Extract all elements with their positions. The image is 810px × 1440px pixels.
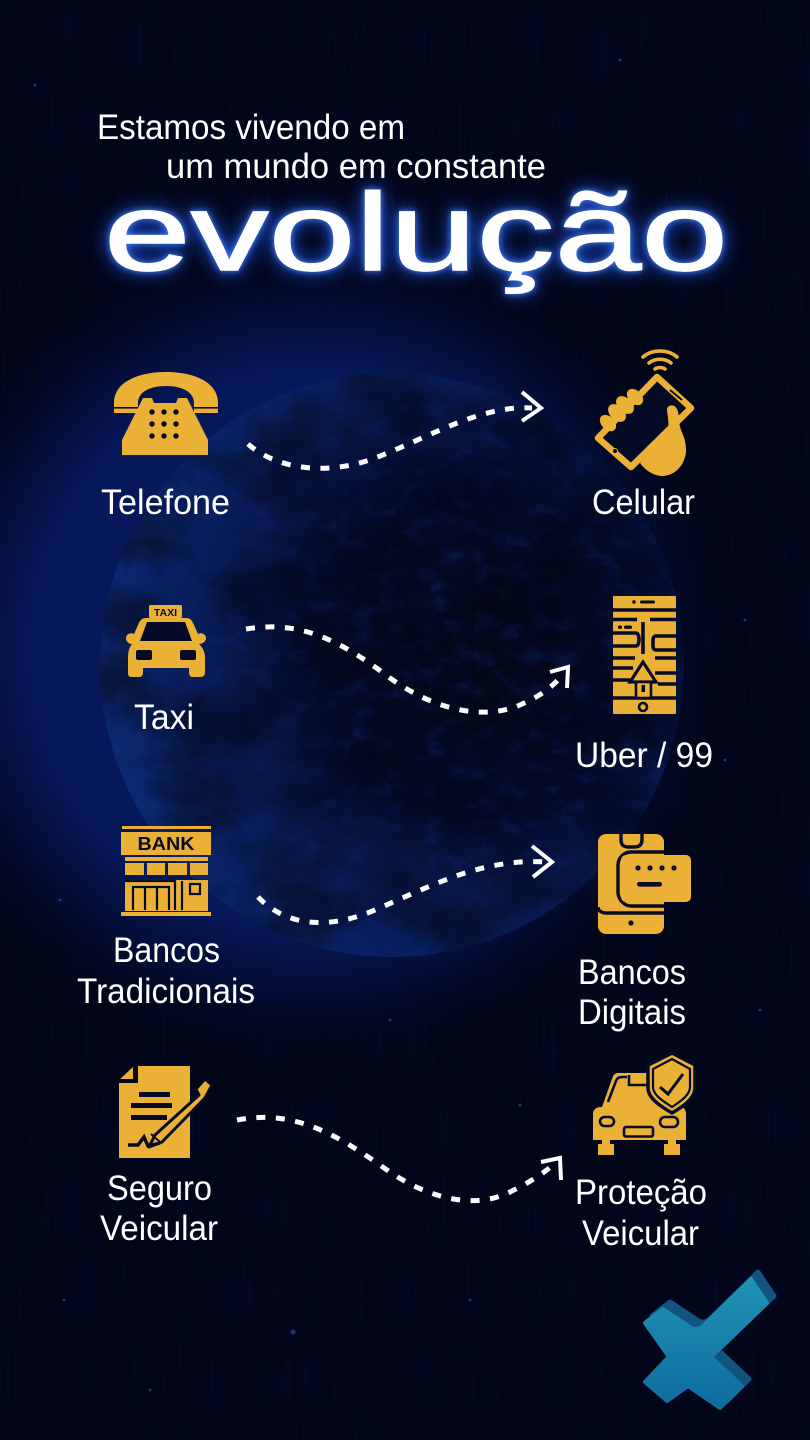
label: Celular: Celular <box>592 483 695 522</box>
title intro text: Estamos vivendo em <box>97 108 405 147</box>
label: Proteção Veicular: Proteção <box>575 1173 707 1212</box>
label: Bancos Tradicionais: Tradicionais <box>77 972 255 1011</box>
label: Proteção Veicular: Veicular <box>582 1214 699 1253</box>
label: Seguro Veicular: Veicular <box>100 1209 218 1248</box>
title intro text <box>97 108 546 186</box>
icon: bank building <box>121 826 211 916</box>
icon: ride app phone map <box>613 596 676 714</box>
label: Bancos Tradicionais <box>77 931 255 1011</box>
label: Seguro Veicular: Seguro <box>107 1169 212 1208</box>
icon: telephone <box>112 372 220 455</box>
label: Bancos Tradicionais: Bancos <box>113 931 220 970</box>
icon: smartphone in hand <box>597 351 691 476</box>
icon: bank building: BANK <box>138 834 194 854</box>
icon: protected car with shield <box>593 1053 695 1155</box>
arrow: taxi to uber <box>246 627 568 712</box>
label: Proteção Veicular <box>575 1173 707 1253</box>
icon: digital bank phone <box>598 832 691 934</box>
arrow: bancos tradicionais to digitais <box>258 846 552 923</box>
icon: signed document <box>119 1066 212 1158</box>
label: Seguro Veicular <box>100 1169 218 1248</box>
label: Telefone: Telefone <box>101 483 230 522</box>
icon: taxi: TAXI <box>154 607 177 619</box>
logo: blue 3D X <box>645 1272 774 1408</box>
arrow: seguro to protecao <box>237 1117 561 1201</box>
label: Bancos Digitais <box>578 953 686 1032</box>
label: Bancos Digitais: Digitais <box>578 993 686 1032</box>
arrow: telefone to celular <box>248 392 541 468</box>
label: Taxi: Taxi <box>134 698 194 737</box>
earth globe <box>100 373 684 957</box>
title: evolução: evolução <box>104 171 728 294</box>
label: Uber / 99: Uber / 99 <box>575 736 713 775</box>
label: Bancos Digitais: Bancos <box>578 953 686 992</box>
icon: taxi <box>126 605 206 677</box>
title intro text: um mundo em constante <box>166 147 546 186</box>
